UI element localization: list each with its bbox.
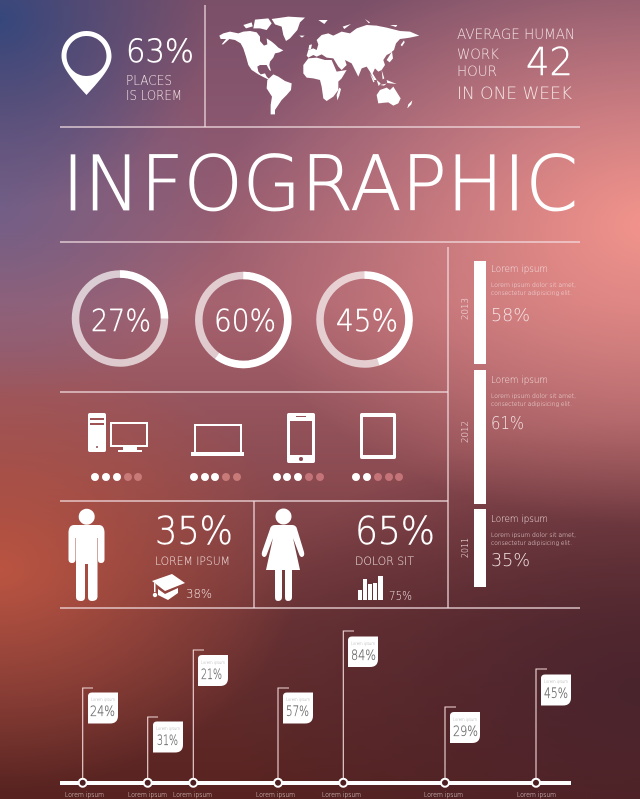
flag marker: 21%: Lorem ipsum xyxy=(201,660,225,666)
stat: 63% places: 63% xyxy=(126,32,194,70)
title: INFOGRAPHIC xyxy=(62,139,578,228)
stat: 35% lorem ipsum xyxy=(155,509,233,601)
timeline entry: 2012: consectetur adipisicing elit. xyxy=(491,401,572,408)
timeline entry: 2012: Lorem ipsum xyxy=(491,375,548,386)
timeline axis xyxy=(60,781,571,785)
timeline entry: 2011: Lorem ipsum xyxy=(491,514,548,525)
stat: average human work hours: 42 xyxy=(526,40,573,84)
stat: average human work hours: IN ONE WEEK xyxy=(457,84,572,104)
flag marker: 21% xyxy=(173,650,228,799)
flag marker: 57%: Lorem ipsum xyxy=(286,697,310,703)
stat: 63% places: IS LOREM xyxy=(126,89,182,104)
stat: 65% dolor sit: 65% xyxy=(355,509,435,553)
flag marker: 45%: Lorem ipsum xyxy=(544,679,568,685)
stat: 35% lorem ipsum: 35% xyxy=(155,509,233,553)
flag marker: 24%: 24% xyxy=(90,704,115,720)
donut chart: 27%: 27% xyxy=(91,304,151,339)
timeline entry: 2012 xyxy=(460,370,576,504)
stat: 65% dolor sit: 75% xyxy=(389,589,412,603)
flag marker: 84% xyxy=(322,631,378,799)
stat: 65% dolor sit xyxy=(355,509,435,603)
donut chart: 45%: 45% xyxy=(336,304,398,339)
flag marker: 45% xyxy=(517,669,571,799)
flag marker: 45%: 45% xyxy=(544,686,568,702)
icon: location pin xyxy=(62,31,112,95)
timeline entry: 2011: 2011 xyxy=(460,538,471,558)
timeline entry: 2013: consectetur adipisicing elit. xyxy=(491,290,572,297)
flag marker: 29%: 29% xyxy=(453,724,478,740)
icon: man xyxy=(68,509,104,601)
stat: average human work hours: HOUR xyxy=(457,64,497,80)
icon: desktop computer xyxy=(88,413,148,452)
flag marker: 24% xyxy=(65,688,118,799)
icon: laptop xyxy=(191,424,244,456)
flag marker: 21%: Lorem ipsum xyxy=(173,791,212,799)
donut chart: 27% xyxy=(76,274,164,363)
timeline entry: 2011: Lorem ipsum dolor sit amet, xyxy=(491,532,576,539)
stat: 63% places: PLACES xyxy=(126,74,172,89)
timeline entry: 2012: Lorem ipsum dolor sit amet, xyxy=(491,393,576,400)
donut chart: 45% xyxy=(320,275,409,364)
world map xyxy=(219,17,419,114)
timeline entry: 2013 xyxy=(460,261,576,364)
flag marker: 57% xyxy=(256,688,313,799)
flag marker: 84%: Lorem ipsum xyxy=(322,791,361,799)
timeline entry: 2012: 2012 xyxy=(460,421,471,443)
timeline entry: 2011: 35% xyxy=(491,550,530,571)
donut chart: 60%: 60% xyxy=(214,304,276,339)
donut chart: 60% xyxy=(199,276,288,364)
stat: average human work hours: AVERAGE HUMAN xyxy=(457,27,575,43)
flag marker: 31% xyxy=(128,717,183,799)
stat: average human work hours: WORK xyxy=(457,47,500,63)
stat: 63% places xyxy=(126,32,194,104)
timeline entry: 2013: Lorem ipsum dolor sit amet, xyxy=(491,282,576,289)
flag marker: 45%: Lorem ipsum xyxy=(517,791,556,799)
timeline entry: 2012: 61% xyxy=(491,413,524,434)
flag marker: 57%: 57% xyxy=(286,704,309,720)
stat: average human work hours xyxy=(457,27,575,104)
timeline entry: 2011 xyxy=(460,509,576,587)
stat: 35% lorem ipsum: LOREM IPSUM xyxy=(155,554,230,568)
flag marker: 21%: 21% xyxy=(201,667,222,683)
icon: smartphone xyxy=(287,413,315,463)
timeline entry: 2011: consectetur adipisicing elit. xyxy=(491,540,572,547)
flag marker: 31%: Lorem ipsum xyxy=(128,791,167,799)
timeline entry: 2013: 58% xyxy=(491,305,530,326)
icon: bar chart xyxy=(358,576,383,600)
flag marker: 29% xyxy=(424,707,480,799)
flag marker: 31%: Lorem ipsum xyxy=(156,726,180,732)
icon: woman xyxy=(262,508,304,601)
flag marker: 29%: Lorem ipsum xyxy=(453,717,477,723)
flag marker: 24%: Lorem ipsum xyxy=(91,697,115,703)
flag marker: 24%: Lorem ipsum xyxy=(65,791,104,799)
stat: 65% dolor sit: DOLOR SIT xyxy=(355,554,414,568)
timeline entry: 2013: Lorem ipsum xyxy=(491,264,548,275)
flag marker: 84%: 84% xyxy=(351,648,376,664)
flag marker: 29%: Lorem ipsum xyxy=(424,791,463,799)
timeline entry: 2013: 2013 xyxy=(460,298,471,320)
flag marker: 84%: Lorem ipsum xyxy=(351,641,375,647)
icon: graduation cap xyxy=(152,574,185,600)
stat: 35% lorem ipsum: 38% xyxy=(186,587,212,601)
icon: tablet xyxy=(360,413,396,459)
device rating dots xyxy=(91,473,403,481)
flag marker: 31%: 31% xyxy=(157,733,178,749)
flag marker: 57%: Lorem ipsum xyxy=(256,791,295,799)
